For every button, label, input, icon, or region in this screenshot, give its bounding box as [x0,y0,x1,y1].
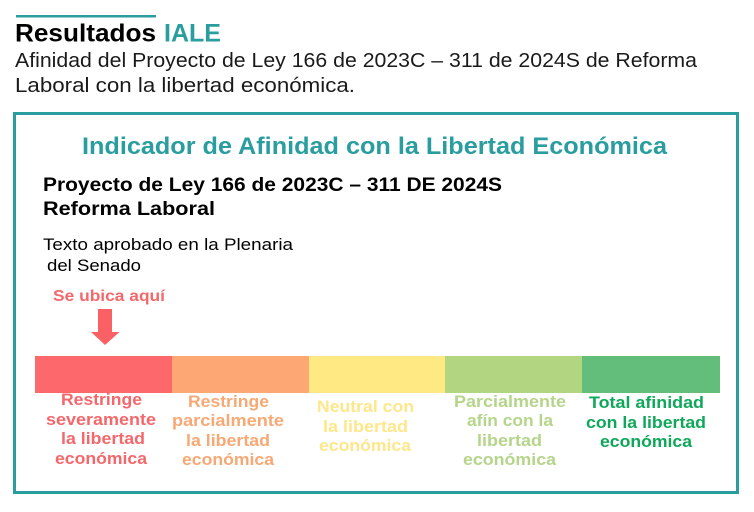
label: severe restriction: la libertad [61,430,145,448]
bill heading: Proyecto de Ley 166 de 2023C – 311 DE 2024S [43,174,502,196]
label: partial affinity [454,393,566,469]
label: partial restriction: parcialmente [172,412,284,430]
subtitle text: Laboral con la libertad económica. [15,75,355,97]
arrow pointing down [91,309,120,345]
label: total affinity: económica [600,433,693,451]
heading: Resultados IALE: IALE [164,20,221,48]
label: neutral: la libertad [323,418,408,436]
subtitle text: Afinidad del Proyecto de Ley 166 de 2023C – 311 de 2024S de Reforma [15,50,698,72]
segment: total affinity [582,356,720,393]
label: total affinity: Total afinidad [589,394,704,412]
header [15,15,698,97]
callout: Se ubica aquí: Se ubica aquí [53,288,166,305]
bill heading: Reforma Laboral [43,198,215,220]
label: partial affinity: económica [463,451,557,469]
approved text note [43,236,294,275]
label: neutral [317,398,414,455]
segment: partial restriction [172,356,309,393]
panel frame [14,114,738,492]
panel: indicator [14,114,738,492]
label: neutral: económica [319,437,412,455]
heading: Resultados IALE [15,20,221,48]
label: total affinity [586,394,706,451]
header accent line [16,15,156,18]
bill heading [43,174,502,220]
label: neutral: Neutral con [317,398,414,416]
heading: Resultados IALE: Resultados [15,20,156,48]
label: total affinity: con la libertad [586,414,706,432]
label: severe restriction: severamente [46,411,156,429]
label: partial restriction: la libertad [186,432,270,450]
subtitle text [15,50,698,97]
segment: partial affinity [445,356,582,393]
approved text note: Texto aprobado en la Plenaria [43,236,294,254]
label: partial restriction: económica [182,451,275,469]
label: partial affinity: libertad [477,432,542,450]
label: severe restriction [46,391,156,468]
label: partial restriction: Restringe [188,393,269,411]
approved text note: del Senado [47,257,141,275]
label: partial affinity: Parcialmente [454,393,566,411]
segment: severe [35,356,172,393]
panel title: Indicador de Afinidad con la Libertad Económica [82,133,667,160]
label: partial affinity: afín con la [467,412,554,430]
scale bar [35,356,720,393]
label: partial restriction [172,393,284,469]
segment: neutral [309,356,445,393]
label: severe restriction: económica [55,450,148,468]
label: severe restriction: Restringe [61,391,142,409]
